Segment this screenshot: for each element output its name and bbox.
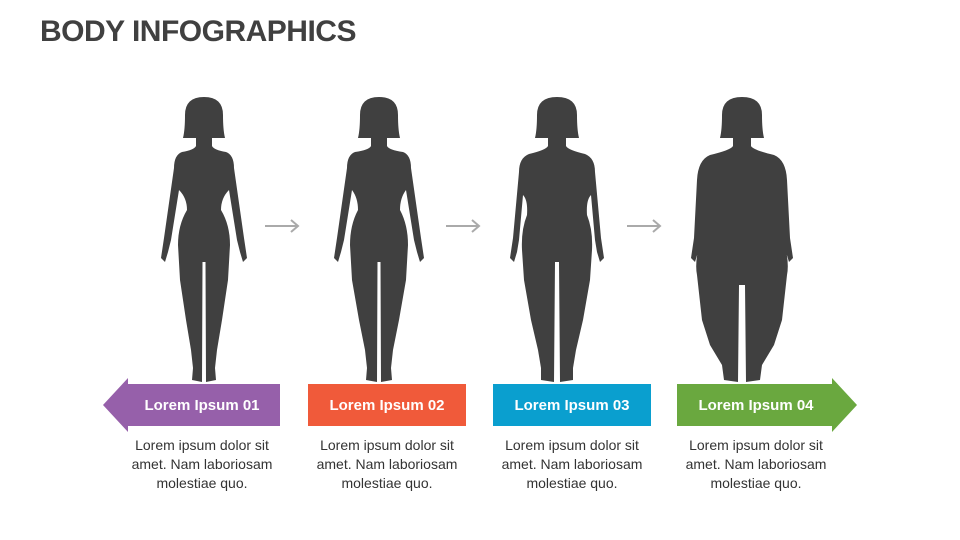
arrow 2 [446,220,479,232]
banner 1 [103,378,280,432]
banner 2 [308,384,466,426]
figure 3 [510,97,604,382]
banner 4 [677,378,857,432]
banner 3: Lorem Ipsum 03 [514,397,630,414]
banner 2: Lorem Ipsum 02 [329,397,445,414]
banner 4: Lorem Ipsum 04 [698,397,814,414]
description 2: Lorem ipsum dolor sit amet. Nam laboriosam molestiae quo. [317,437,457,491]
description 4: Lorem ipsum dolor sit amet. Nam laboriosam molestiae quo. [686,437,826,491]
banner 1: Lorem Ipsum 01 [144,397,260,414]
figure 2 [334,97,424,382]
arrow 3 [627,220,660,232]
arrow 1 [265,220,298,232]
banner 3 [493,384,651,426]
description 1: Lorem ipsum dolor sit amet. Nam laboriosam molestiae quo. [132,437,272,491]
title: BODY INFOGRAPHICS [40,15,356,48]
description 3: Lorem ipsum dolor sit amet. Nam laboriosam molestiae quo. [502,437,642,491]
figure 4 [691,97,793,382]
figure 1 slim [161,97,247,382]
